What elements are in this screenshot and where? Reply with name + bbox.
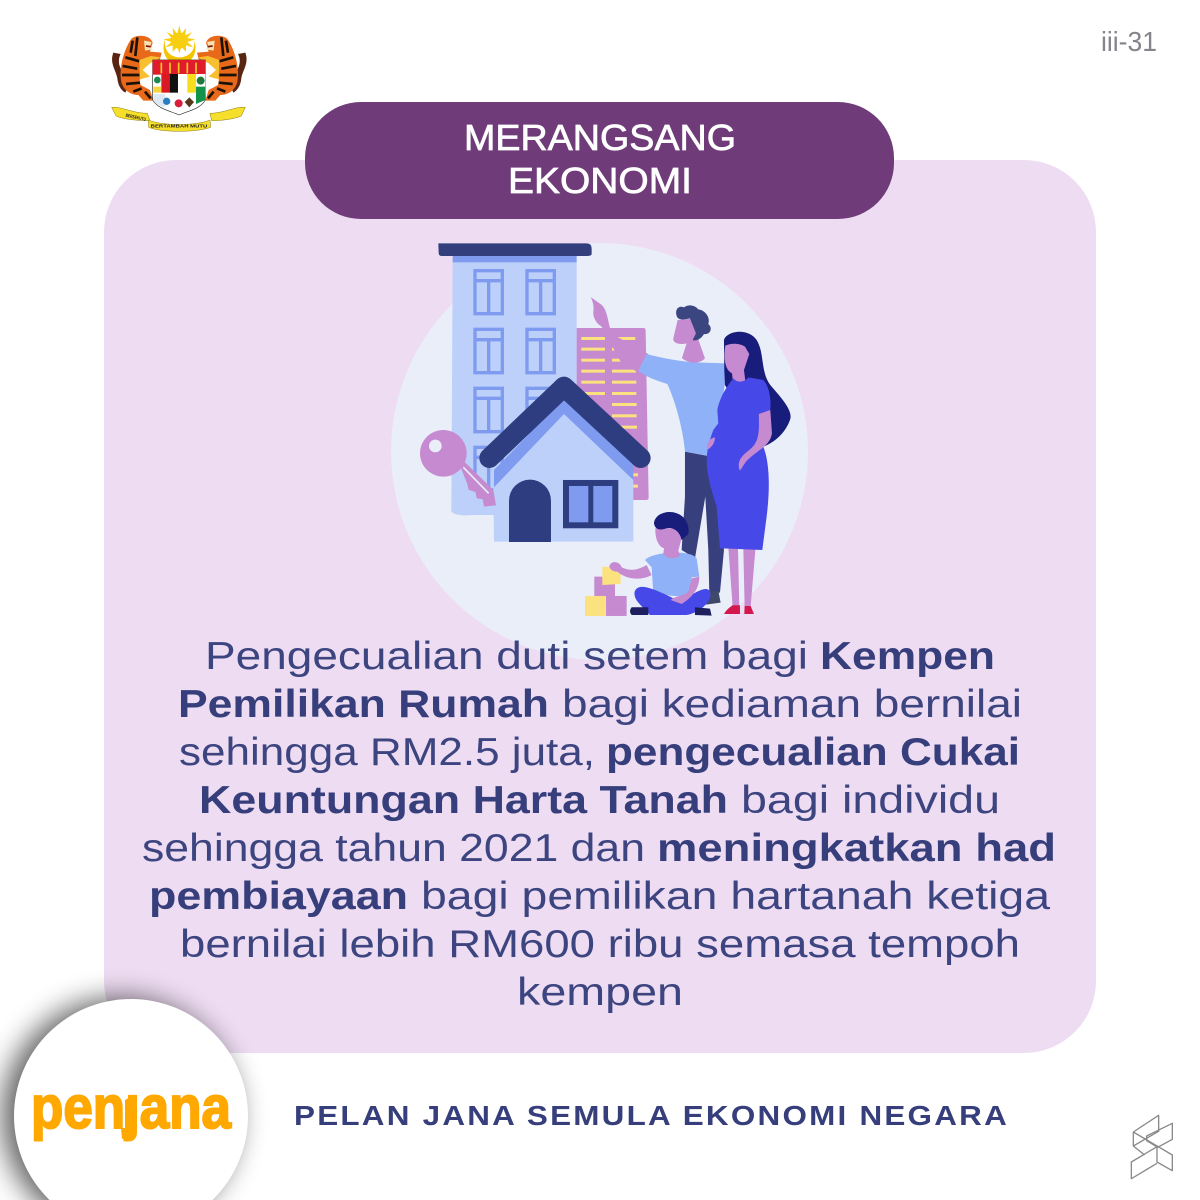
trousers	[682, 452, 724, 593]
motto ribbons	[112, 107, 245, 131]
pink tower	[577, 328, 649, 500]
body paragraph: meningkatkan had	[657, 827, 1056, 870]
heading: EKONOMI	[508, 160, 692, 201]
blocks	[585, 567, 627, 616]
face and neck	[725, 344, 749, 384]
footer tagline: PELAN JANA SEMULA EKONOMI NEGARA	[294, 1100, 1009, 1131]
arm and hands	[707, 410, 772, 471]
child head	[655, 528, 682, 558]
icon: Malaysian coat of arms	[112, 25, 247, 131]
heading: MERANGSANG	[464, 117, 736, 158]
hair	[676, 305, 711, 340]
child with blocks	[585, 512, 712, 616]
body paragraph	[142, 635, 1056, 1014]
right tiger	[197, 36, 247, 101]
motto ribbons: BERTAMBAH MUTU	[151, 123, 208, 128]
body paragraph: Keuntungan Harta Tanah	[199, 779, 728, 822]
heading	[464, 117, 736, 201]
crescent and sun	[163, 25, 195, 65]
page number: iii-31	[1101, 26, 1157, 57]
panel: main lilac card	[104, 160, 1096, 1053]
body paragraph: bagi individu	[741, 779, 1000, 822]
illustration: family and homes	[391, 243, 808, 660]
shield	[153, 60, 205, 115]
window	[563, 480, 618, 528]
pointing arm	[591, 297, 648, 373]
left tiger	[112, 36, 162, 101]
door	[509, 480, 551, 542]
motto ribbons: BERSEKUTU	[125, 113, 147, 122]
child legs	[634, 587, 711, 615]
icon: corner logo	[1131, 1115, 1172, 1179]
body paragraph: Pemilikan Rumah	[178, 683, 549, 726]
body paragraph: pengecualian Cukai	[606, 731, 1020, 774]
child arm	[609, 562, 652, 579]
shirt	[638, 354, 725, 456]
wheat top of the j	[116, 1076, 140, 1139]
body paragraph: bagi pemilikan hartanah ketiga	[421, 875, 1050, 918]
penjana logo badge	[2, 998, 248, 1200]
body paragraph: Kempen	[820, 635, 995, 678]
legs	[728, 547, 756, 607]
body paragraph: sehingga tahun 2021 dan	[142, 827, 645, 870]
house	[489, 387, 641, 542]
penjana wordmark: penjana	[31, 1074, 232, 1141]
body paragraph: bernilai lebih RM600 ribu semasa tempoh	[180, 923, 1020, 966]
hair	[724, 332, 791, 447]
body paragraph: kempen	[517, 971, 683, 1014]
shoes	[724, 605, 754, 614]
background circle	[391, 243, 808, 660]
head	[673, 318, 705, 363]
body paragraph: pembiayaan	[149, 875, 408, 918]
body paragraph: bagi kediaman bernilai	[562, 683, 1022, 726]
body paragraph: Pengecualian duti setem bagi	[205, 635, 808, 678]
child shirt	[645, 553, 699, 597]
body paragraph: sehingga RM2.5 juta,	[179, 731, 595, 774]
dress	[707, 377, 771, 550]
woman	[707, 332, 791, 614]
title pill	[305, 102, 894, 219]
man	[591, 297, 725, 605]
key	[420, 430, 496, 507]
apartment building	[438, 243, 592, 515]
